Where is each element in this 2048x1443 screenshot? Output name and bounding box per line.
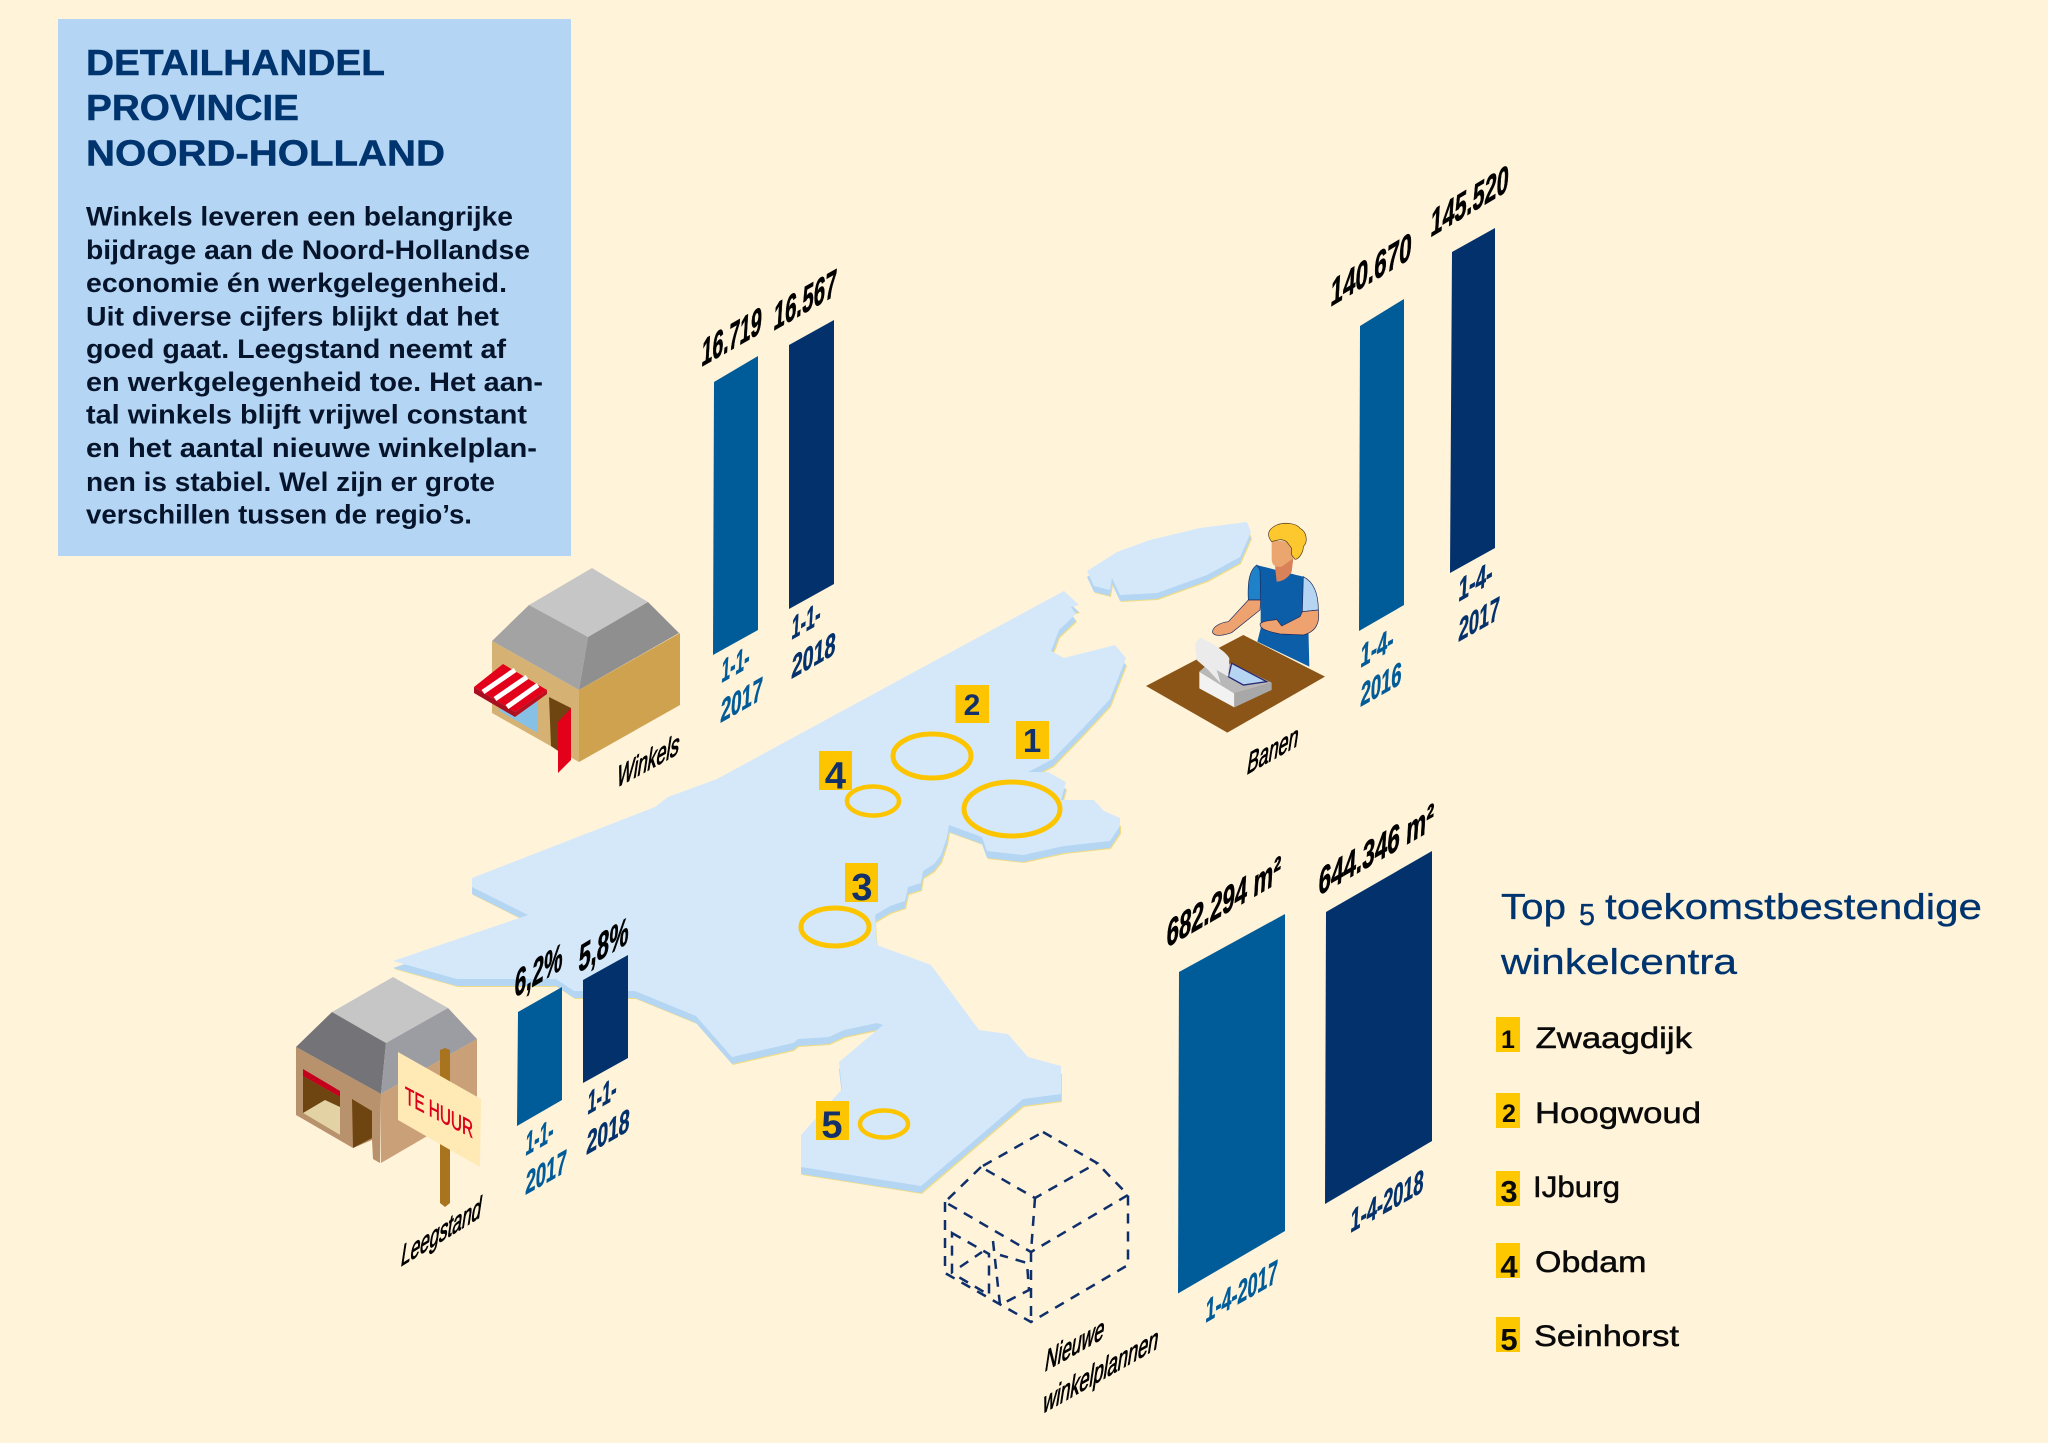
text block: introduction: goed gaat. Leegstand neemt af	[86, 334, 507, 364]
text block: introduction	[86, 202, 543, 530]
legend item 4: 4	[1500, 1249, 1518, 1284]
bar chart: leegstand: 2017	[525, 1142, 568, 1202]
label: Leegstand: Leegstand	[399, 1189, 484, 1274]
legend heading: winkelcentra	[1500, 941, 1738, 982]
icon: shop (winkels)	[474, 568, 680, 773]
bar chart: winkels	[700, 260, 838, 730]
icon: vacant shop with sign (leegstand): TE HUUR	[405, 1082, 473, 1144]
legend item 2: 2	[1502, 1100, 1516, 1128]
bar chart: leegstand: 2018	[586, 1101, 631, 1162]
bar chart: winkels: 1-1-	[791, 594, 822, 647]
bar chart: leegstand: 1-1-	[587, 1069, 618, 1122]
legend item 1	[1496, 1017, 1693, 1055]
text block: introduction: economie én werkgelegenheid.	[86, 268, 507, 298]
heading: title	[86, 42, 445, 174]
bar chart: banen: 145.520	[1430, 156, 1510, 246]
legend item 1: Zwaagdijk	[1536, 1022, 1693, 1055]
text block: introduction: nen is stabiel. Wel zijn er grote	[86, 467, 495, 497]
map marker 3: 3	[851, 867, 873, 909]
bar chart: winkels: 16.719	[700, 298, 763, 375]
legend item 2	[1496, 1093, 1701, 1130]
map marker 4	[819, 751, 899, 816]
bar chart: nieuwe winkelplannen: 644.346 m²	[1318, 794, 1435, 904]
bar chart: banen	[1330, 156, 1510, 714]
legend heading: Top	[1501, 886, 1566, 927]
text block: introduction: verschillen tussen de regio’s.	[86, 500, 472, 530]
bar chart: leegstand: 6,2%	[514, 934, 564, 1006]
bar chart: nieuwe winkelplannen: 1-4-2017	[1205, 1252, 1279, 1330]
bar chart: leegstand: 1-1-	[525, 1110, 555, 1163]
icon: dashed planned shop (nieuwe winkelplannen)	[945, 1132, 1128, 1322]
bar chart: nieuwe winkelplannen	[1166, 794, 1435, 1330]
map marker 3	[801, 863, 878, 946]
panel: top 5 legend	[1496, 886, 1982, 1357]
map marker 2	[893, 685, 989, 778]
bar chart: nieuwe winkelplannen: 1-4-2018	[1350, 1162, 1425, 1240]
map marker 2: 2	[964, 689, 980, 722]
label: Nieuwe winkelplannen: winkelplannen	[1040, 1321, 1161, 1422]
label: Banen: Banen	[1245, 718, 1301, 782]
label: Nieuwe winkelplannen: Nieuwe	[1043, 1311, 1107, 1379]
icon: vacant shop with sign (leegstand)	[296, 977, 481, 1207]
bar chart: leegstand	[514, 908, 631, 1202]
panel: intro text box	[58, 19, 571, 556]
text block: introduction: Winkels leveren een belangrijke	[86, 202, 513, 232]
bar chart: banen: 1-4-	[1360, 620, 1395, 675]
map marker 4: 4	[825, 756, 846, 798]
text block: introduction: Uit diverse cijfers blijkt dat het	[86, 302, 499, 332]
legend item 3	[1496, 1171, 1620, 1209]
bar chart: winkels: 1-1-	[721, 637, 751, 690]
text block: introduction: en werkgelegenheid toe. Het aan-	[86, 367, 543, 397]
legend item 5	[1496, 1317, 1680, 1357]
legend item 3: 3	[1500, 1174, 1518, 1209]
legend item 5: 5	[1500, 1322, 1518, 1357]
text block: introduction: bijdrage aan de Noord-Hollandse	[86, 235, 530, 265]
heading: title: NOORD-HOLLAND	[86, 132, 445, 174]
legend item 4	[1496, 1243, 1646, 1284]
text block: introduction: tal winkels blijft vrijwel constant	[86, 400, 527, 430]
icon: cashier at till (banen)	[1146, 523, 1325, 733]
bar chart: banen: 140.670	[1330, 223, 1413, 315]
bar chart: winkels: 2017	[720, 669, 764, 730]
bar chart: banen: 1-4-	[1458, 553, 1494, 609]
heading: title: PROVINCIE	[86, 87, 299, 128]
legend item 2: Hoogwoud	[1535, 1097, 1701, 1130]
bar chart: banen: 2017	[1458, 589, 1501, 649]
legend item 3: IJburg	[1533, 1171, 1620, 1204]
label: Winkels: Winkels	[615, 726, 682, 795]
bar chart: banen: 2016	[1360, 654, 1403, 714]
legend item 5: Seinhorst	[1534, 1320, 1680, 1353]
text block: introduction: en het aantal nieuwe winkelplan-	[86, 433, 537, 463]
legend heading	[1500, 886, 1982, 982]
bar chart: nieuwe winkelplannen: 682.294 m²	[1166, 847, 1282, 956]
bar chart: winkels: 16.567	[772, 260, 838, 339]
bar chart: leegstand: 5,8%	[578, 908, 630, 981]
map marker 5	[816, 1101, 908, 1146]
map marker 1	[964, 721, 1060, 836]
bar chart: winkels: 2018	[791, 624, 837, 686]
legend item 1: 1	[1501, 1026, 1515, 1054]
legend heading: 5	[1579, 897, 1595, 932]
map: Noord-Holland province	[393, 522, 1252, 1194]
label: Nieuwe winkelplannen	[1040, 1311, 1161, 1422]
map marker 5: 5	[821, 1104, 843, 1146]
heading: title: DETAILHANDEL	[86, 42, 385, 83]
legend heading: toekomstbestendige	[1605, 886, 1982, 927]
legend item 4: Obdam	[1535, 1246, 1646, 1279]
map marker 1: 1	[1023, 722, 1041, 759]
